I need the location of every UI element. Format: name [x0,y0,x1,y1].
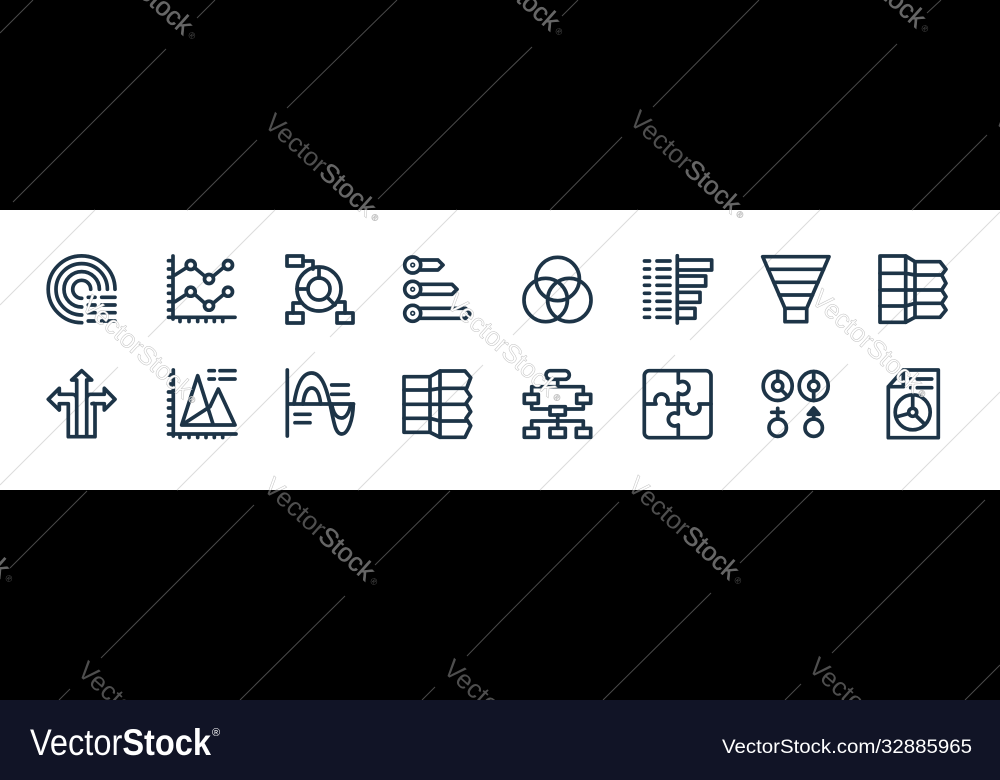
icon: donut chart with boxes [287,256,353,323]
watermarks on black: ® [913,756,925,768]
watermarks on black: ® [182,760,194,772]
icon: jigsaw puzzle [644,371,711,438]
watermarks on white: ® [734,209,746,221]
white icon band [0,210,1000,490]
watermarks on black: ® [553,26,565,38]
watermarks on white: VectorStock [259,107,382,222]
watermarks on black: VectorStock [803,651,926,766]
icon: three tag bars [405,257,471,321]
watermarks on black: VectorStock [622,470,745,585]
watermarks on black: ® [186,30,198,42]
icon: horizontal bar list [644,256,712,323]
icon: line chart [168,256,235,322]
watermarks on black: ® [369,212,381,224]
watermarks on black: ® [734,209,746,221]
icon: funnel [763,257,829,322]
watermarks on black: ® [3,573,15,585]
watermarks on white: VectorStock [258,471,382,587]
icon: mountain area chart [168,370,236,438]
icon: sine wave chart [287,370,354,436]
watermarks on black: ® [368,576,380,588]
icon: three way arrows [48,371,115,437]
watermarks on black: ® [732,575,744,587]
watermarks on white: VectorStock [441,287,564,402]
watermarks on white: ® [186,394,198,406]
icon: concentric arcs with list [48,256,115,323]
watermarks on white: VectorStock [622,470,746,586]
footer bar [0,700,1000,780]
watermarks on black: VectorStock [258,471,381,586]
watermarks on black: VectorStock [259,107,382,222]
watermarks on white: VectorStock [76,289,199,404]
watermarks on white: ® [916,388,928,400]
watermarks on white: VectorStock [806,283,929,398]
registered mark: ® [212,727,220,739]
icon: venn diagram [524,257,591,322]
watermarks on white [85,210,926,490]
icon: report with pie chart [888,370,938,438]
footer image id: VectorStock.com/32885965 [722,736,972,758]
icon: table with folded tags [404,371,471,437]
watermarks on black: ® [548,758,560,770]
footer logo: VectorStock [30,722,211,763]
watermarks on black: ® [919,23,931,35]
watermarks on white: VectorStock [624,104,747,219]
icon: flow chart hierarchy [524,371,591,437]
watermarks on white: ® [551,392,563,404]
watermarks on black: VectorStock [72,655,195,770]
icon: folded table with tags [880,256,946,322]
watermarks on black: VectorStock [624,104,747,219]
icon: gender donut charts [763,372,828,436]
watermarks on black: VectorStock [438,653,561,768]
watermarks on white: ® [369,212,381,224]
